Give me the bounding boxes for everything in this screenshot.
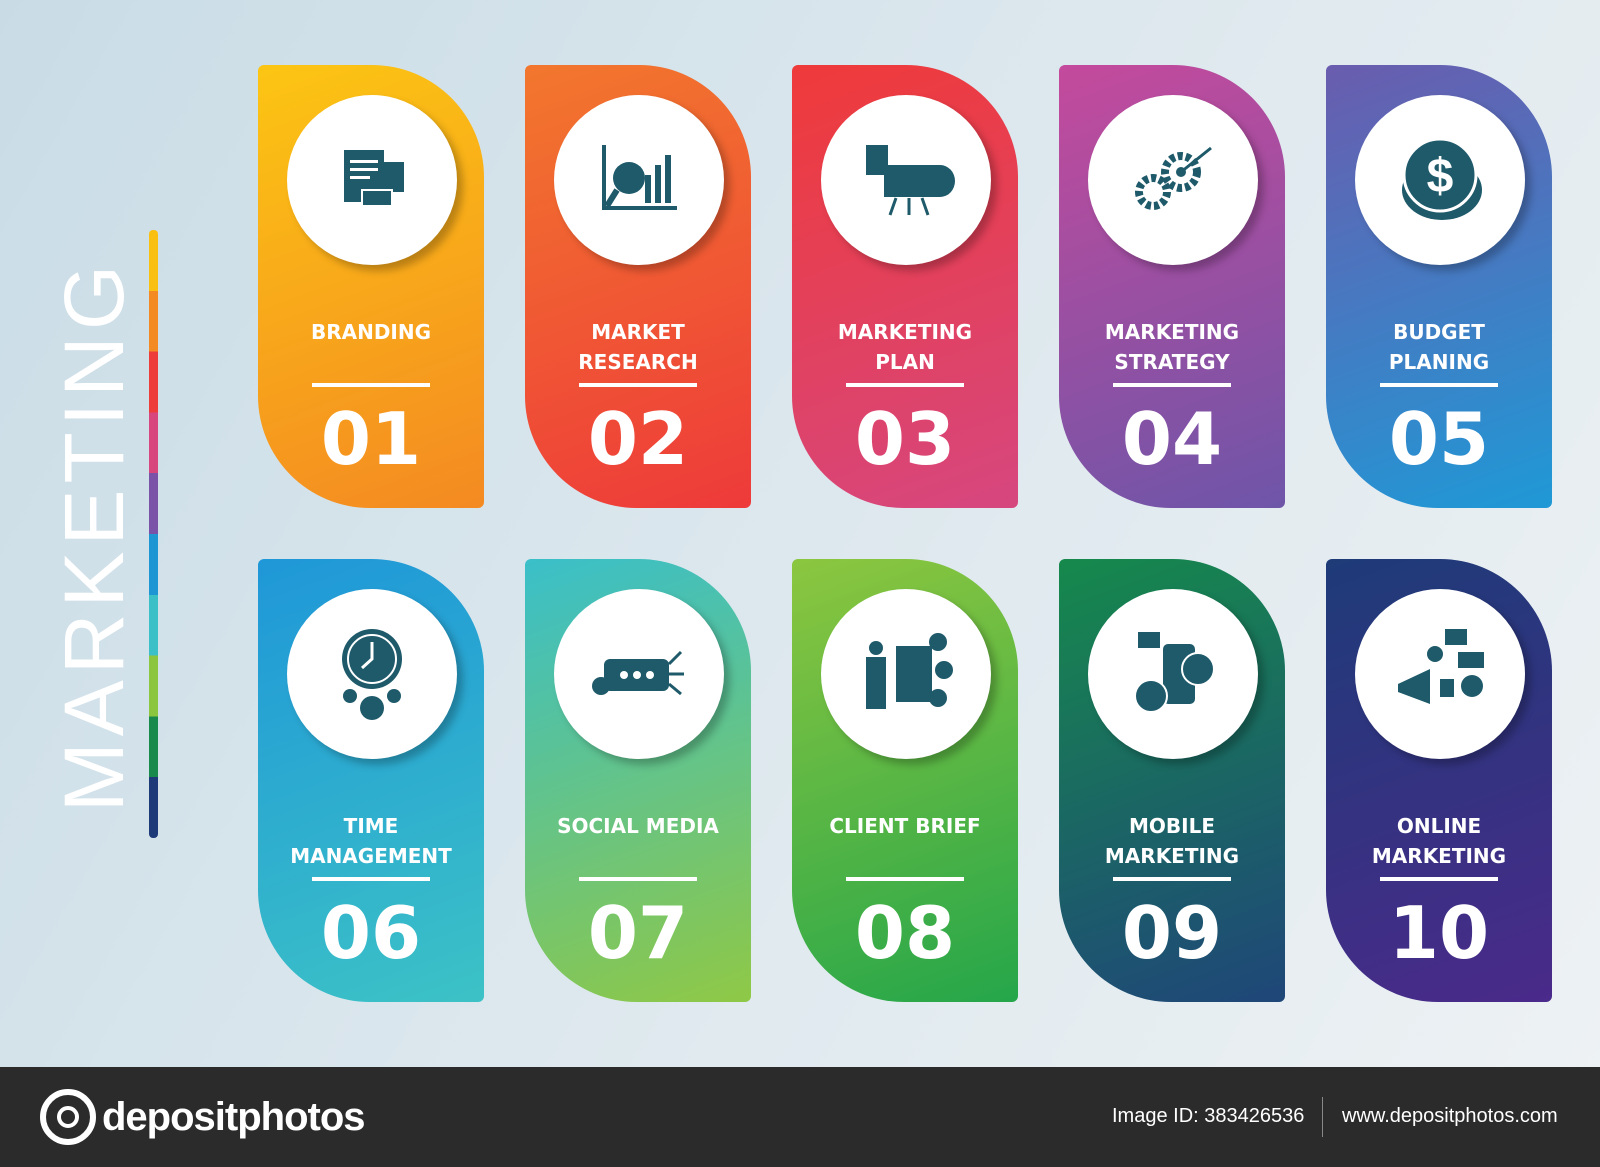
card 10: ONLINE: [1397, 814, 1481, 838]
card 04: STRATEGY: [1114, 350, 1230, 374]
card 01: BRANDING: [311, 320, 431, 344]
card 04: 04: [1122, 397, 1222, 481]
card 10: 10: [1389, 891, 1489, 975]
card 09: 09: [1122, 891, 1222, 975]
card 09: MARKETING: [1105, 844, 1239, 868]
card 07: SOCIAL MEDIA: [557, 814, 719, 838]
card 05: PLANING: [1389, 350, 1489, 374]
title: MARKETING vertical: MARKETING: [48, 258, 142, 812]
card 07: 07: [588, 891, 688, 975]
card 10: [1326, 559, 1552, 1002]
card 05: 05: [1389, 397, 1489, 481]
card 02: RESEARCH: [578, 350, 698, 374]
card 03: PLAN: [875, 350, 935, 374]
color bar: [149, 230, 158, 838]
card 06: TIME: [344, 814, 398, 838]
card 05: BUDGET: [1393, 320, 1485, 344]
image id: Image ID: 383426536: [1112, 1105, 1304, 1127]
card 08: CLIENT BRIEF: [829, 814, 981, 838]
card 06: MANAGEMENT: [290, 844, 452, 868]
footer bar: www.depositphotos.com: [1342, 1105, 1558, 1127]
card 04: MARKETING: [1105, 320, 1239, 344]
card 08: 08: [855, 891, 955, 975]
logo: depositphotos: [102, 1094, 365, 1138]
card 06: [258, 559, 484, 1002]
card 08: [792, 559, 1018, 1002]
card 02: MARKET: [591, 320, 685, 344]
card 10: MARKETING: [1372, 844, 1506, 868]
card 05: $: [1427, 150, 1454, 203]
footer bar: [0, 1067, 1600, 1167]
card 09: [1059, 559, 1285, 1002]
card 01: [258, 65, 484, 508]
card 05: [1326, 65, 1552, 508]
card 01: 01: [321, 397, 421, 481]
card 07: [525, 559, 751, 1002]
card 03: 03: [855, 397, 955, 481]
card 02: 02: [588, 397, 688, 481]
card 06: 06: [321, 891, 421, 975]
card 09: MOBILE: [1129, 814, 1215, 838]
card 03: [792, 65, 1018, 508]
card 03: MARKETING: [838, 320, 972, 344]
card 04: [1059, 65, 1285, 508]
card 02: [525, 65, 751, 508]
logo: [40, 1089, 365, 1145]
